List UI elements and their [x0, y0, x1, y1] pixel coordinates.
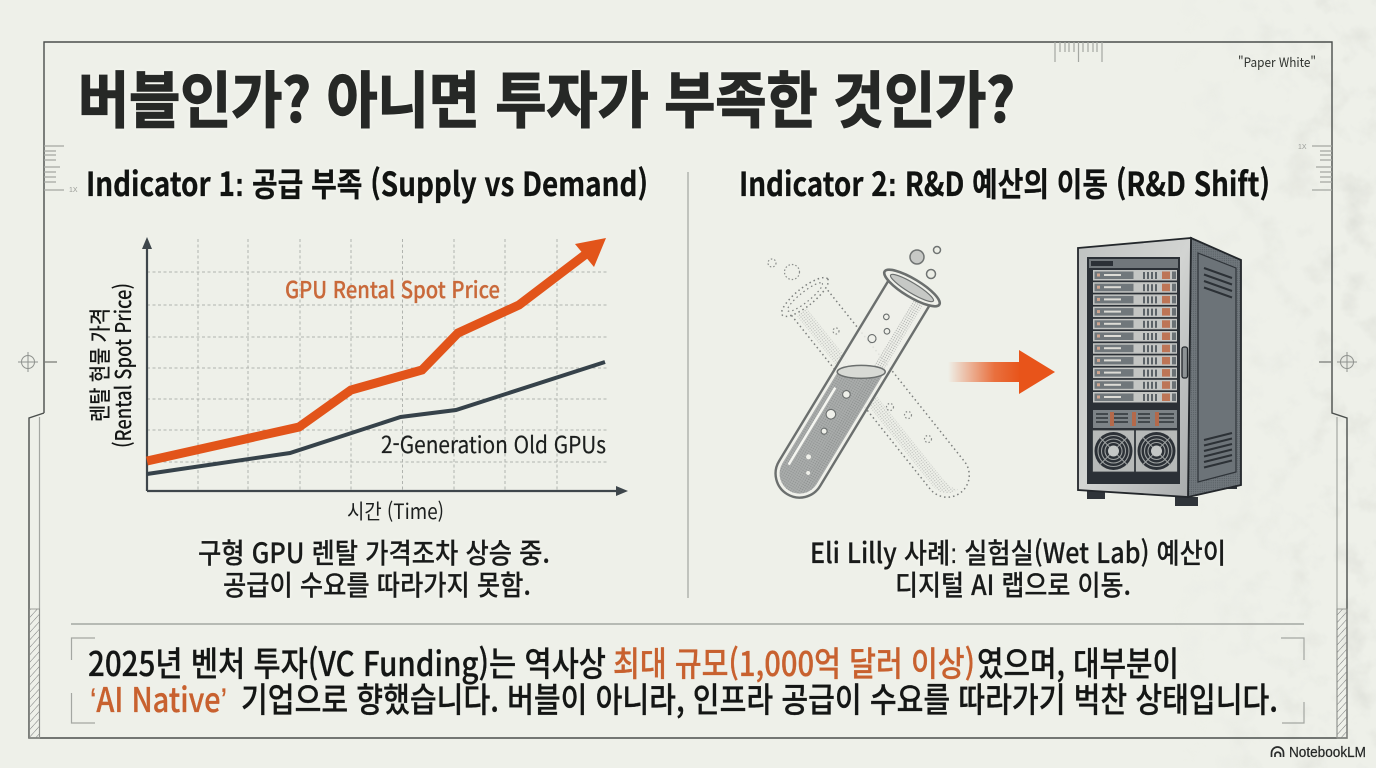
- y axis label: (Rental Spot Price): [106, 283, 138, 448]
- icon: faded dotted test tube: [777, 272, 984, 510]
- callout line 1: 최대 규모(1,000억 달러 이상): [613, 637, 975, 686]
- caption: indicator 2: Eli Lilly 사례: 실험실(Wet Lab) 예산이: [810, 532, 1226, 572]
- y axis label: [83, 283, 138, 448]
- arrow: wet lab to digital lab: [948, 350, 1055, 394]
- icon: test tube: [760, 264, 944, 511]
- rack feet: [1087, 481, 1237, 506]
- tag: Paper White: "Paper White": [1238, 52, 1316, 71]
- title: 버블인가? 아니면 투자가 부족한 것인가?: [78, 51, 1015, 140]
- caption: indicator 2: 디지털 AI 랩으로 이동.: [895, 564, 1131, 604]
- series: 2-generation old GPUs: [147, 362, 605, 474]
- icon: server rack: [1078, 238, 1241, 506]
- y axis: [142, 237, 152, 491]
- icon: faded bubbles: [768, 259, 932, 442]
- blueprint frame: 1X: [1298, 144, 1307, 151]
- callout line 1: [88, 637, 1179, 686]
- series: GPU rental spot price: [147, 238, 606, 461]
- callout: conclusion: [71, 624, 1304, 723]
- rack side panel: [1188, 238, 1241, 497]
- caption: indicator 1: [198, 532, 550, 604]
- rack front frame: [1078, 238, 1191, 497]
- y axis label: 렌탈 현물 가격: [83, 308, 115, 422]
- door handle: [1182, 347, 1188, 378]
- series label: GPU Rental Spot Price: GPU Rental Spot Price: [285, 271, 500, 305]
- caption: indicator 1: 구형 GPU 렌탈 가격조차 상승 중.: [198, 532, 550, 572]
- caption: indicator 1: 공급이 수요를 따라가지 못함.: [223, 564, 531, 604]
- series label: 2-Generation Old GPUs: 2-Generation Old GPUs: [381, 426, 606, 460]
- watermark: NotebookLM: NotebookLM: [1289, 745, 1366, 761]
- x axis label: 시간 (Time): [347, 496, 444, 526]
- line chart: GPU rental price: [83, 237, 628, 526]
- paper background: [1340, 34, 1374, 702]
- icon: rising bubbles: [910, 246, 940, 278]
- rack units: [1093, 270, 1177, 402]
- callout line 2: ‘AI Native’: [90, 673, 227, 722]
- vent module: [1093, 410, 1177, 428]
- heading: indicator 2: Indicator 2: R&D 예산의 이동 (R&D Shift): [739, 158, 1270, 206]
- x axis: [147, 486, 628, 496]
- callout line 1: 였으며, 대부분이: [977, 637, 1179, 686]
- cooling fans: [1092, 430, 1178, 472]
- liquid bubbles: [791, 312, 901, 476]
- caption: indicator 2: [810, 532, 1226, 604]
- blueprint frame: 1X: [69, 187, 78, 194]
- callout line 1: 2025년 벤처 투자(VC Funding)는 역사상: [88, 637, 606, 686]
- heading: indicator 1: Indicator 1: 공급 부족 (Supply vs Demand): [86, 158, 648, 206]
